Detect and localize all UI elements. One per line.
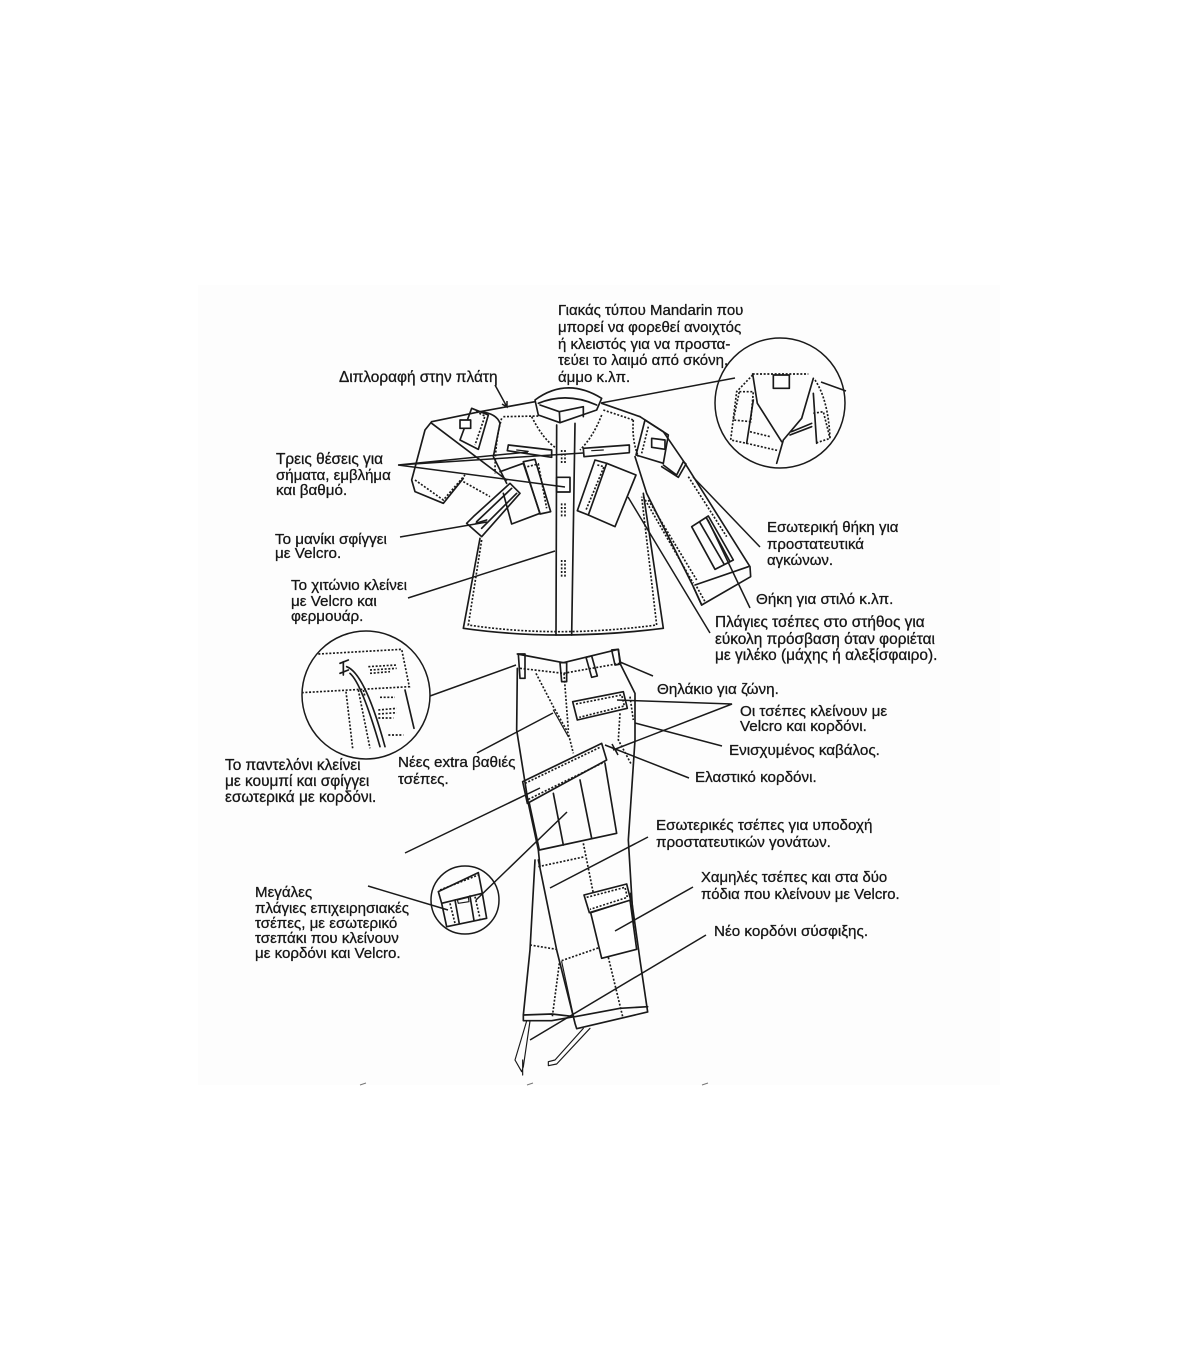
callout: trouser closure: εσωτερικά με κορδόνι. xyxy=(225,789,376,806)
callout: sleeve velcro: Το μανίκι σφίγγει xyxy=(275,531,387,548)
callout: new drawcord xyxy=(530,923,868,1040)
legs xyxy=(523,860,574,1021)
drawstrings xyxy=(515,1021,530,1075)
waistband xyxy=(517,649,620,663)
slant pockets right xyxy=(588,463,636,527)
slant pockets left xyxy=(500,463,540,524)
callout: sleeve velcro xyxy=(275,522,487,562)
callout: trouser closure xyxy=(225,757,376,806)
callout: belt loops: Θηλάκιο για ζώνη. xyxy=(657,681,779,698)
leader: long line to cargo pocket xyxy=(405,788,540,853)
callout: Mandarin collar detail circle xyxy=(601,338,846,468)
chest pockets xyxy=(507,445,552,457)
knee seams xyxy=(538,843,593,893)
callout: trouser closure: Το παντελόνι κλείνει xyxy=(225,757,361,774)
callout: Mandarin collar xyxy=(558,302,743,386)
fly xyxy=(536,673,573,753)
callout: jacket closure: Το χιτώνιο κλείνει xyxy=(291,577,407,594)
callout: Mandarin collar: μπορεί να φορεθεί ανοιχτός xyxy=(558,319,741,336)
callout: velcro and cord pockets xyxy=(613,700,887,750)
callout: jacket closure: φερμουάρ. xyxy=(291,608,363,625)
outer seams xyxy=(517,668,538,850)
callout: velcro and cord pockets: Velcro και κορδόνι. xyxy=(740,718,867,735)
callout: elbow pads pocket: προστατευτικά xyxy=(767,536,864,553)
callout: low pockets: πόδια που κλείνουν με Velcro. xyxy=(701,887,900,903)
shoulder yoke xyxy=(480,402,640,417)
callout: three badge positions: σήματα, εμβλήμα xyxy=(276,467,391,484)
belt loops xyxy=(518,649,621,682)
callout: pen pocket: Θήκη για στιλό κ.λπ. xyxy=(756,591,893,608)
callout: extra deep pockets: Νέες extra βαθιές xyxy=(398,754,515,771)
callout: large cargo pockets: πλάγιες επιχειρησιακές xyxy=(255,900,409,917)
callout: slanted chest pockets: με γιλέκο (μάχης ή αλεξίσφαιρο). xyxy=(715,647,937,664)
callout: knee pad pockets: προστατευτικών γονάτων. xyxy=(656,834,831,851)
callout: large cargo pockets: με κορδόνι και Velcro. xyxy=(255,945,401,962)
callout: Mandarin collar: άμμο κ.λπ. xyxy=(558,369,630,386)
callout: elastic cord: Ελαστικό κορδόνι. xyxy=(695,769,817,786)
pen pocket xyxy=(692,516,733,569)
right sleeve patch xyxy=(636,420,668,463)
callout: cargo pocket detail circle xyxy=(368,812,567,934)
callout: large cargo pockets: τσέπες, με εσωτερικό xyxy=(255,915,397,932)
callout: reinforced crotch: Ενισχυμένος καβάλος. xyxy=(729,742,880,759)
callout: large cargo pockets: Μεγάλες xyxy=(255,884,312,901)
callout: jacket closure xyxy=(291,551,555,625)
callout: reinforced crotch xyxy=(635,723,880,759)
slash pocket xyxy=(573,692,627,720)
jacket illustration xyxy=(412,388,751,635)
callout: elbow pads pocket: Εσωτερική θήκη για xyxy=(767,519,899,536)
callout: sleeve velcro: με Velcro. xyxy=(275,545,341,562)
cargo pocket xyxy=(529,763,617,850)
callout: velcro and cord pockets: Οι τσέπες κλείνουν με xyxy=(740,703,887,720)
callout: three badge positions: Τρεις θέσεις για xyxy=(276,451,383,468)
callout: belt loops xyxy=(620,662,779,698)
callout: trouser waist detail circle xyxy=(302,631,516,759)
lower pocket xyxy=(591,900,637,958)
callout: slanted chest pockets xyxy=(628,497,937,664)
callout: jacket closure: με Velcro και xyxy=(291,593,377,610)
left cuff xyxy=(467,483,520,537)
callout: three badge positions: και βαθμό. xyxy=(276,482,347,499)
callout: extra deep pockets xyxy=(398,713,553,788)
callout: slanted chest pockets: εύκολη πρόσβαση όταν φοριέται xyxy=(715,631,935,648)
callout: trouser closure: με κουμπί και σφίγγει xyxy=(225,773,369,790)
callout: double stitch on back xyxy=(339,369,507,407)
callout: double stitch on back: Διπλοραφή στην πλάτη xyxy=(339,369,498,386)
callout: knee pad pockets xyxy=(550,817,872,888)
callout: elbow pads pocket: αγκώνων. xyxy=(767,552,833,569)
callout: low pockets: Χαμηλές τσέπες και στα δύο xyxy=(701,870,887,886)
callout: elastic cord xyxy=(605,744,817,786)
callout: Mandarin collar: Γιακάς τύπου Mandarin που xyxy=(558,302,743,319)
jacket body xyxy=(463,493,663,635)
left sleeve (viewer) xyxy=(412,412,507,503)
collar xyxy=(535,388,602,423)
callout: low pockets xyxy=(615,870,900,931)
left sleeve patch xyxy=(460,408,488,449)
callout: Mandarin collar: τεύει το λαιμό από σκόνη, xyxy=(558,352,728,369)
patch on chest xyxy=(557,477,570,492)
cargo flap xyxy=(523,743,607,803)
callout: new drawcord: Νέο κορδόνι σύσφιξης. xyxy=(714,923,868,940)
trousers illustration xyxy=(515,649,648,1075)
callout: large cargo pockets: τσεπάκι που κλείνουν xyxy=(255,930,399,947)
right sleeve xyxy=(635,417,751,605)
callout: pen pocket xyxy=(708,520,893,608)
callout: extra deep pockets: τσέπες. xyxy=(398,771,449,788)
callout: Mandarin collar: ή κλειστός για να προστα- xyxy=(558,336,730,353)
callout: slanted chest pockets: Πλάγιες τσέπες στο στήθος για xyxy=(715,614,925,631)
callout: elbow pads pocket xyxy=(693,477,899,569)
callout: knee pad pockets: Εσωτερικές τσέπες για υποδοχή xyxy=(656,817,872,834)
callout: large cargo pockets xyxy=(255,884,409,962)
callout: three badge positions xyxy=(276,451,583,499)
